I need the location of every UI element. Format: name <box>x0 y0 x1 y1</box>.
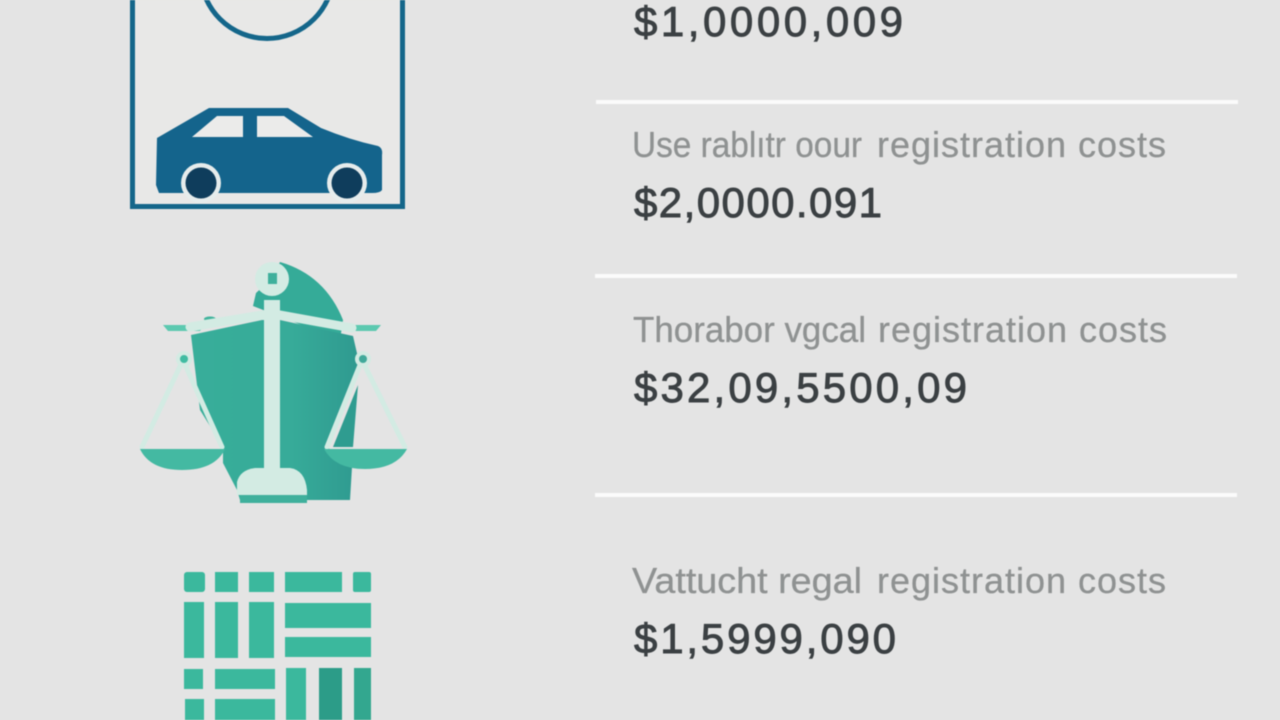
row 2: label <box>632 124 1166 165</box>
row 3: amount: $32,09,5500,09 <box>634 364 967 411</box>
row 3: label <box>633 309 1167 350</box>
icon: car in document frame <box>132 0 402 206</box>
car body <box>156 108 382 203</box>
row 2: label: registration costs <box>877 124 1166 165</box>
icon: balance scale <box>140 262 407 503</box>
row 4: label <box>632 560 1166 601</box>
row 3: label: Thorabor vgcal <box>633 309 866 350</box>
row 4: label: Vattucht regal <box>632 560 862 601</box>
row 2: amount: $2,0000.091 <box>634 179 882 226</box>
icon: grid of tiles <box>184 572 371 720</box>
row 4: amount: $1,5999,090 <box>634 615 896 662</box>
row 3: label: registration costs <box>878 309 1167 350</box>
row 4: label: registration costs <box>877 560 1166 601</box>
row 2: label: Use rablıtr oour <box>632 124 862 165</box>
